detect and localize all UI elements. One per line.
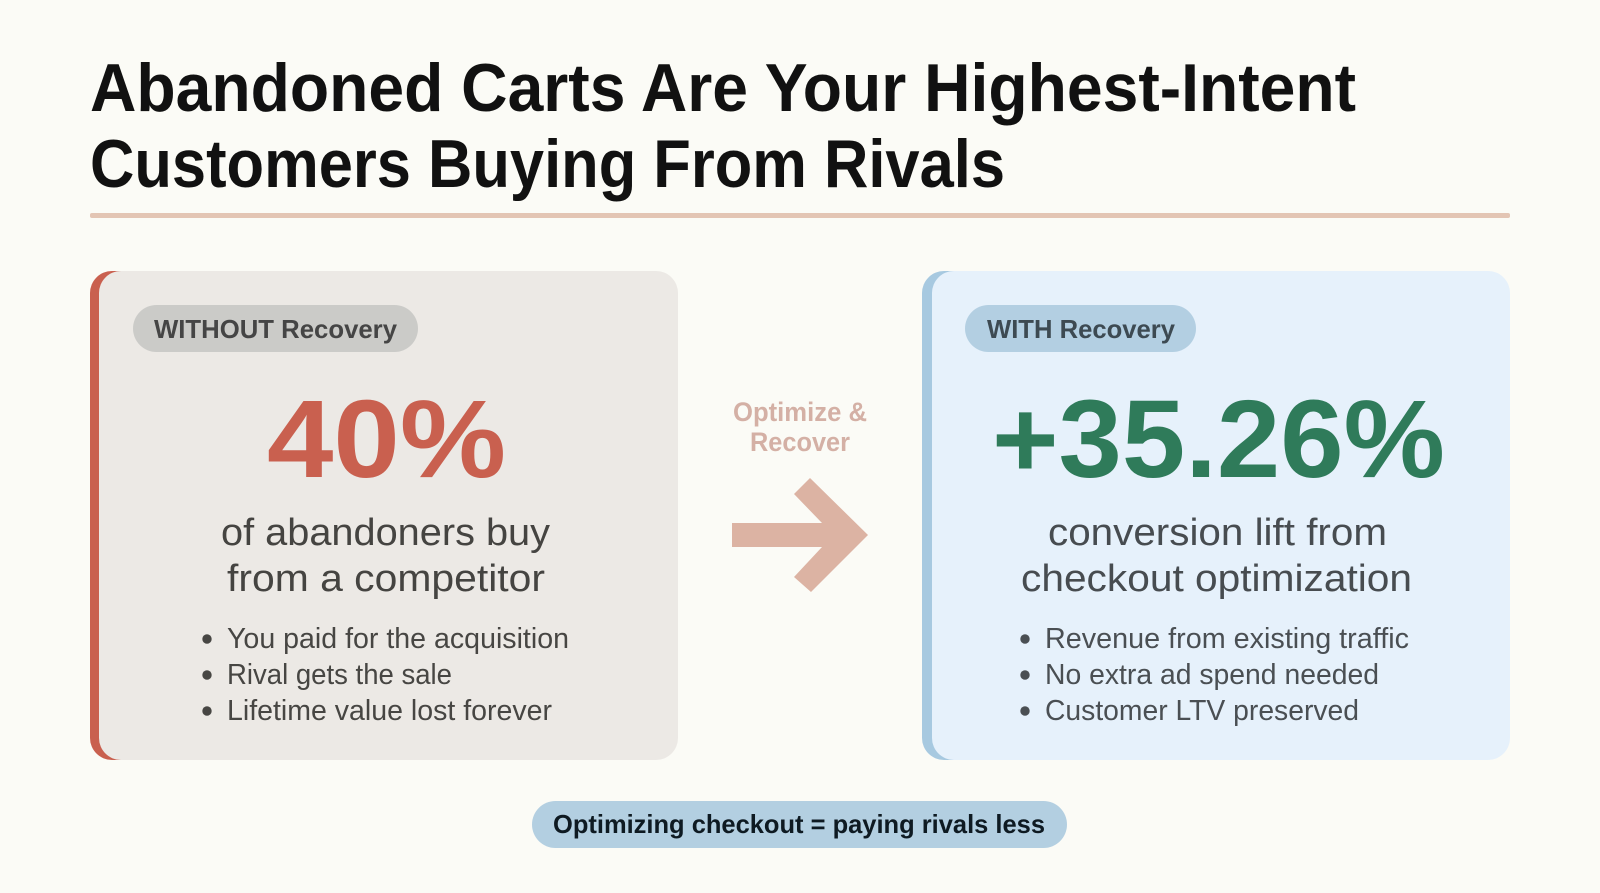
- bullet list: with recovery: No extra ad spend needed: [1045, 659, 1379, 691]
- bullet list: without recovery: Lifetime value lost forever: [227, 695, 552, 727]
- description: competitor: from a competitor: [227, 558, 545, 600]
- badge: without recovery: [133, 305, 418, 352]
- bullet list: with recovery: [1020, 623, 1409, 727]
- description: conversion lift: [1021, 512, 1412, 600]
- icon: arrow: [732, 478, 868, 592]
- bullet list: without recovery: [202, 623, 569, 727]
- description: competitor: [221, 512, 550, 600]
- arrow label: Recover: [750, 427, 850, 457]
- description: conversion lift: checkout optimization: [1021, 558, 1412, 600]
- title: [90, 50, 1356, 202]
- bullet list: with recovery: Customer LTV preserved: [1045, 695, 1359, 727]
- badge: without recovery: WITHOUT Recovery: [154, 314, 398, 344]
- bullet list: with recovery: Revenue from existing traffic: [1045, 623, 1409, 655]
- badge: with recovery: [965, 305, 1196, 352]
- title: Abandoned Carts Are Your Highest-Intent: [90, 50, 1356, 126]
- badge: with recovery: WITH Recovery: [987, 314, 1176, 344]
- description: conversion lift: conversion lift from: [1048, 512, 1387, 554]
- panel: with recovery: [922, 271, 1510, 760]
- stat: +35.26%: +35.26%: [992, 378, 1445, 501]
- bullet list: without recovery: You paid for the acquisition: [227, 623, 569, 655]
- description: competitor: of abandoners buy: [221, 512, 550, 554]
- title: Customers Buying From Rivals: [90, 126, 1005, 202]
- callout: takeaway: [532, 801, 1067, 848]
- arrow label: [733, 397, 867, 457]
- callout: takeaway: Optimizing checkout = paying rivals less: [553, 809, 1045, 839]
- stat: 40%: 40%: [267, 378, 506, 501]
- panel: without recovery: [90, 271, 678, 760]
- bullet list: without recovery: Rival gets the sale: [227, 659, 452, 691]
- arrow label: Optimize &: [733, 397, 867, 427]
